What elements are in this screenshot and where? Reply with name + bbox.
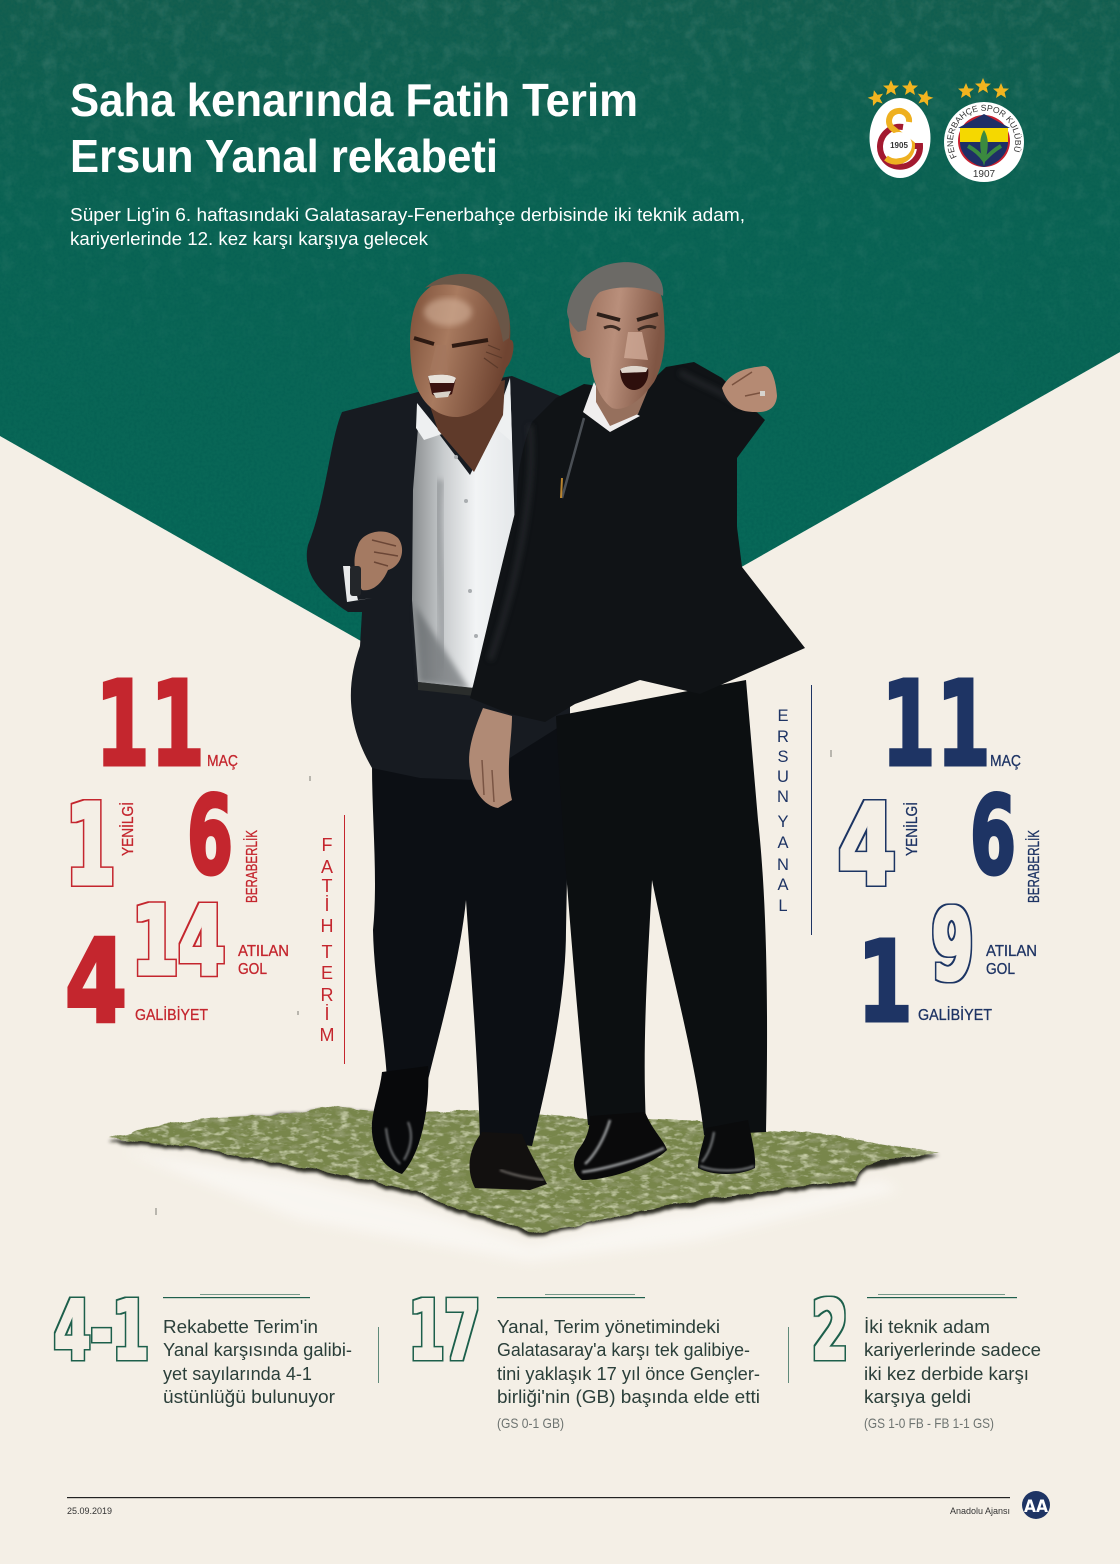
watch and cuff	[343, 566, 372, 602]
title: Ersun Yanal rekabeti	[70, 130, 498, 182]
head	[569, 265, 665, 409]
fact: 4-1: yet sayılarında 4-1	[163, 1364, 312, 1384]
lanyard	[562, 418, 584, 498]
footer: 25.09.2019	[67, 1506, 112, 1516]
fact: 4-1	[54, 1284, 352, 1407]
paper specks	[155, 750, 832, 1215]
jacket	[307, 376, 570, 780]
stat: 4 wins	[65, 915, 208, 1048]
stat: 1 win	[857, 918, 992, 1048]
head	[410, 275, 513, 417]
grass shadow	[120, 1150, 900, 1262]
shoes	[574, 1112, 667, 1180]
trousers	[372, 685, 570, 1146]
logo: Anadolu Ajansı	[1022, 1491, 1050, 1519]
pointing hand	[722, 366, 777, 412]
stat: 6 draws: 6	[187, 774, 233, 899]
fact: 17: 17	[409, 1284, 480, 1379]
stat: 1 win: 1	[857, 918, 913, 1048]
name: Ersun Yanal: ERSUN YANAL	[777, 707, 789, 915]
fact: 2	[812, 1284, 1041, 1431]
trousers	[556, 680, 767, 1135]
fist	[355, 532, 402, 590]
fact: 17: Yanal, Terim yönetimindeki	[497, 1317, 720, 1337]
rule	[344, 815, 345, 1064]
stat: 1 win: GALİBİYET	[918, 1006, 992, 1024]
subtitle: kariyerlerinde 12. kez karşı karşıya gelecek	[70, 229, 429, 249]
fact: 2: (GS 1-0 FB - FB 1-1 GS)	[864, 1415, 994, 1431]
belt	[418, 682, 474, 696]
stat: 6 draws: BERABERLİK	[1025, 830, 1043, 903]
jacket	[470, 362, 805, 722]
stat: 14 goals: ATILAN	[238, 943, 289, 960]
fact: 2: 2	[812, 1284, 848, 1379]
title: Saha kenarında Fatih Terim	[70, 74, 638, 126]
stat: 4 losses: YENİLGİ	[903, 802, 921, 856]
fact: 17: Galatasaray'a karşı tek galibiye-	[497, 1340, 750, 1360]
panel: Ersun Yanal stats	[777, 655, 1043, 1048]
logo: Fenerbahçe	[944, 78, 1024, 182]
jacket highlights	[490, 372, 740, 660]
fact: 4-1: Yanal karşısında galibi-	[163, 1340, 352, 1360]
stat: 9 goals: ATILAN	[986, 943, 1037, 960]
stat: 6 draws: 6	[970, 774, 1016, 899]
stat: 9 goals	[932, 889, 1037, 1003]
logo: Fenerbahçe: 1907	[973, 169, 996, 180]
stat: 9 goals: GOL	[986, 961, 1015, 978]
figure: Ersun Yanal	[469, 262, 805, 1180]
neck	[428, 380, 505, 472]
shirt	[412, 378, 518, 688]
panel: Fatih Terim stats	[65, 655, 345, 1064]
subtitle	[70, 205, 745, 249]
fact: 17	[409, 1284, 760, 1431]
stat: 1 loss: 1	[66, 781, 116, 911]
stat: 14 goals: 14	[132, 887, 225, 997]
divider	[788, 1327, 789, 1383]
divider	[378, 1327, 379, 1383]
lowered hand	[469, 708, 512, 808]
stat: 6 draws: BERABERLİK	[243, 830, 261, 903]
stat: 9 goals: 9	[932, 889, 973, 1003]
logo: Galatasaray: 1905	[890, 141, 908, 150]
fact: 4-1: üstünlüğü bulunuyor	[163, 1387, 335, 1407]
fact: 2: iki kez derbide karşı	[864, 1364, 1029, 1384]
neck	[596, 378, 650, 426]
fact: 4-1: Rekabette Terim'in	[163, 1317, 318, 1337]
stat: 4 wins: GALİBİYET	[135, 1006, 208, 1024]
fact: 17: tini yaklaşık 17 yıl önce Gençler-	[497, 1364, 760, 1384]
stat: 11 matches: 11	[95, 655, 205, 793]
stat: 11 matches: MAÇ	[207, 753, 238, 770]
fact: 2: karşıya geldi	[864, 1387, 971, 1407]
fact: 2: kariyerlerinde sadece	[864, 1340, 1041, 1360]
name: Fatih Terim: FATİH TERİM	[320, 835, 334, 1045]
stat: 1 loss: YENİLGİ	[119, 802, 137, 856]
shoes	[372, 1066, 428, 1174]
logo: Fenerbahçe: FENERBAHÇE SPOR KULÜBÜ	[947, 104, 1022, 159]
rule	[811, 685, 812, 935]
fact: 2: İki teknik adam	[864, 1317, 990, 1337]
background: green textured chevron	[0, 0, 1120, 641]
stat: 11 matches: 11	[881, 655, 991, 793]
stat: 11 matches: MAÇ	[990, 753, 1021, 770]
footer	[67, 1491, 1050, 1519]
title	[70, 74, 638, 182]
fact: 17: (GS 0-1 GB)	[497, 1415, 564, 1431]
grass patch	[108, 1107, 940, 1237]
footer: Anadolu Ajansı	[950, 1506, 1010, 1516]
logo: Galatasaray	[866, 80, 935, 178]
shirt collar	[583, 382, 640, 432]
stat: 4 wins: 4	[65, 915, 127, 1048]
logo: Anadolu Ajansı: AA	[1024, 1497, 1049, 1517]
stat: 14 goals: GOL	[238, 961, 267, 978]
stat: 4 losses: 4	[838, 781, 896, 911]
figure: Fatih Terim	[307, 274, 570, 1190]
subtitle: Süper Lig'in 6. haftasındaki Galatasaray-Fenerbahçe derbisinde iki teknik adam,	[70, 205, 745, 225]
fact: 4-1: 4-1	[54, 1284, 149, 1379]
fact: 17: birliği'nin (GB) başında elde etti	[497, 1387, 760, 1407]
